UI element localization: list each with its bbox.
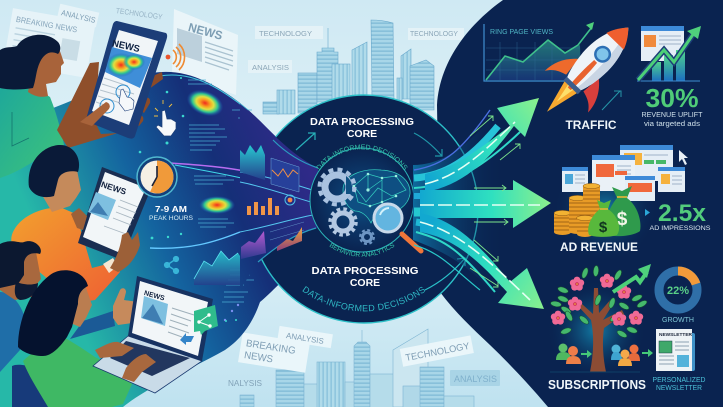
cuff	[103, 258, 118, 273]
heading: core top	[310, 116, 414, 140]
heading: ad revenue: AD REVENUE	[560, 240, 638, 254]
heading: core bottom	[312, 265, 418, 289]
tablet	[78, 167, 152, 260]
arc label: behavior analytics: BEHAVIOR ANALYTICS	[330, 242, 394, 257]
label: technology	[408, 28, 464, 40]
chart: orange area	[270, 222, 304, 251]
blue arm	[70, 311, 115, 339]
label: technology	[255, 26, 323, 39]
icon: newsletter	[656, 329, 695, 371]
donut: 22% growth: 22%	[667, 285, 689, 297]
browser windows	[562, 145, 685, 201]
heading: core bottom: DATA PROCESSING	[312, 265, 418, 277]
stat caption: REVENUE UPLIFT	[642, 112, 703, 119]
uplift bars and arrow	[637, 26, 701, 81]
share bubble	[194, 305, 218, 335]
caption: personalized newsletter: PERSONALIZED	[652, 377, 706, 384]
panel: subscriptions	[546, 264, 706, 392]
chart label: RING PAGE VIEWS	[490, 29, 553, 36]
icon: signal waves	[166, 44, 185, 70]
data particles	[139, 77, 239, 322]
label: technology: TECHNOLOGY	[259, 29, 312, 38]
stream lines	[414, 110, 520, 292]
icon: small money bag	[588, 200, 619, 237]
clipping: news page: NEWS	[187, 20, 224, 43]
phone heatmap	[105, 47, 152, 88]
person: woman with phone	[0, 35, 163, 178]
phone heatmap spot 2	[123, 54, 145, 70]
phone headline: NEWS	[111, 38, 141, 55]
icon: readers right	[611, 344, 653, 366]
arm and hand	[57, 62, 118, 148]
tablet headline: NEWS	[100, 179, 128, 197]
icon: flowering tree	[550, 265, 648, 372]
arrow: top right	[414, 133, 442, 156]
label: analysis: NALYSIS	[228, 379, 262, 388]
icon: small money bag: $	[599, 219, 608, 236]
arrow: to subscriptions	[420, 213, 544, 309]
floating labels bottom	[228, 326, 500, 388]
glow	[553, 158, 657, 262]
panel: traffic	[484, 7, 703, 133]
target dot	[285, 195, 295, 205]
article lines	[96, 78, 134, 107]
heading: subscriptions: SUBSCRIPTIONS	[548, 378, 646, 392]
curved text paths	[316, 149, 408, 176]
neck: left connection	[240, 104, 318, 290]
person: woman at laptop	[12, 270, 132, 407]
right navy panel	[437, 0, 723, 407]
caption: growth: GROWTH	[662, 317, 694, 324]
heatmap 1	[183, 85, 227, 121]
heading: core top: DATA PROCESSING	[310, 116, 414, 128]
label: technology: TECHNOLOGY	[410, 31, 458, 38]
share icon	[165, 257, 178, 273]
label: technology	[400, 335, 474, 367]
chart: orange line	[271, 158, 299, 192]
heading: core bottom: CORE	[350, 277, 380, 289]
label: analysis: ANALYSIS	[60, 8, 96, 25]
arc label: outer decisions: DATA-INFORMED DECISIONS	[302, 286, 425, 312]
icon: large gear	[320, 170, 354, 204]
label: technology: TECHNOLOGY	[115, 6, 163, 21]
arrow: to ad revenue	[420, 180, 551, 228]
stream highlights	[420, 122, 540, 300]
stream base	[413, 120, 505, 292]
share arrow	[180, 333, 194, 345]
arrow: bottom right	[425, 258, 465, 290]
typing hands	[95, 342, 156, 382]
left data band	[0, 72, 320, 407]
top arc glow	[160, 75, 248, 110]
inner circle	[310, 148, 414, 252]
icon: cursor	[679, 150, 688, 165]
floating news clippings top	[3, 4, 464, 95]
orange shirt	[11, 208, 120, 304]
heading: traffic: TRAFFIC	[566, 118, 617, 132]
hand cursor on phone	[119, 89, 134, 111]
clipping: breaking news	[3, 8, 96, 78]
label: analysis: ANALYSIS	[454, 374, 497, 384]
icon: magnifier	[374, 204, 421, 251]
icon: rocket	[525, 7, 650, 133]
central core circle	[240, 94, 478, 324]
caption: personalized newsletter: NEWSLETTER	[656, 385, 702, 392]
icon: medium gear	[330, 209, 356, 235]
blue shirt	[0, 292, 26, 372]
donut: 22% growth	[659, 271, 697, 309]
hair	[0, 35, 60, 90]
hair	[0, 241, 41, 288]
chart: orange bars	[247, 198, 279, 215]
inner data lines left	[240, 172, 318, 232]
browser with orange ad	[641, 26, 684, 61]
person: bearded man	[0, 241, 140, 372]
icon: large money bag	[606, 186, 640, 236]
page views chart	[484, 22, 594, 81]
marker	[645, 209, 650, 216]
icon: coin stacks	[554, 183, 600, 237]
beard	[15, 282, 38, 300]
face	[0, 252, 41, 300]
label: analysis	[248, 60, 292, 73]
bottom skyline	[240, 329, 474, 407]
light stream	[150, 232, 240, 248]
shirt	[0, 87, 64, 178]
device: laptop	[93, 276, 218, 393]
arrow: top left	[296, 133, 315, 150]
label: analysis	[277, 326, 333, 348]
data streams to outcomes	[413, 98, 551, 309]
heatmap 2	[199, 196, 235, 214]
chair	[12, 365, 68, 407]
panel: ad revenue	[553, 145, 711, 262]
green shirt	[23, 338, 132, 407]
icon: hand cursor	[154, 100, 176, 136]
clipping: news page	[172, 9, 238, 95]
icon: readers left	[556, 344, 592, 364]
face	[66, 282, 92, 327]
stat caption: via targeted ads	[644, 121, 701, 128]
stat: 2.5x: 2.5x	[658, 200, 707, 227]
label: technology: TECHNOLOGY	[405, 341, 471, 364]
label: breaking news: NEWS	[243, 350, 274, 366]
laptop headline: NEWS	[143, 290, 166, 303]
hair	[29, 145, 79, 197]
label: peak time: 7-9 AM	[155, 204, 187, 214]
thumbs up hand	[113, 288, 140, 325]
neck and face	[28, 44, 64, 97]
arrow: to traffic	[425, 98, 539, 192]
icon: newsletter: NEWSLETTER	[659, 332, 693, 337]
label: analysis	[57, 4, 99, 27]
hair	[18, 270, 88, 356]
label: breaking news	[238, 332, 310, 373]
arc label: data-informed decisions: DATA-INFORMED DECISIONS	[316, 144, 408, 170]
label: peak time	[149, 204, 194, 222]
growth arrow	[613, 264, 651, 292]
icon: small gear	[360, 230, 374, 244]
small arrow	[602, 91, 621, 110]
label: analysis: ANALYSIS	[285, 331, 324, 346]
code lines	[188, 80, 254, 302]
caption: personalized newsletter	[652, 377, 706, 392]
thin arrows	[470, 116, 520, 287]
top skyline	[263, 20, 434, 114]
label: analysis	[450, 370, 500, 386]
face	[42, 170, 81, 212]
icon: large money bag: $	[617, 209, 628, 230]
fingers behind phone	[135, 72, 163, 126]
device: phone	[80, 21, 167, 139]
stat caption	[642, 112, 703, 128]
chart: teal area	[194, 251, 242, 285]
stat caption: AD IMPRESSIONS	[650, 225, 711, 232]
clipping: breaking news: BREAKING NEWS	[15, 15, 78, 34]
glow	[546, 280, 646, 380]
neck edges	[258, 140, 318, 262]
chart: teal peaks	[240, 145, 265, 180]
label: breaking news: BREAKING	[245, 338, 296, 357]
stat: 30%: 30%	[646, 83, 698, 113]
chart: purple area	[241, 231, 266, 259]
icon: clock	[137, 157, 177, 197]
icon: brain network	[343, 170, 410, 223]
heading: core top: CORE	[347, 128, 377, 140]
label: peak time: PEAK HOURS	[149, 215, 194, 222]
label: analysis: ANALYSIS	[252, 63, 289, 72]
person: boy with tablet	[11, 145, 152, 304]
hands on tablet	[71, 208, 140, 272]
pointing finger	[80, 102, 110, 126]
